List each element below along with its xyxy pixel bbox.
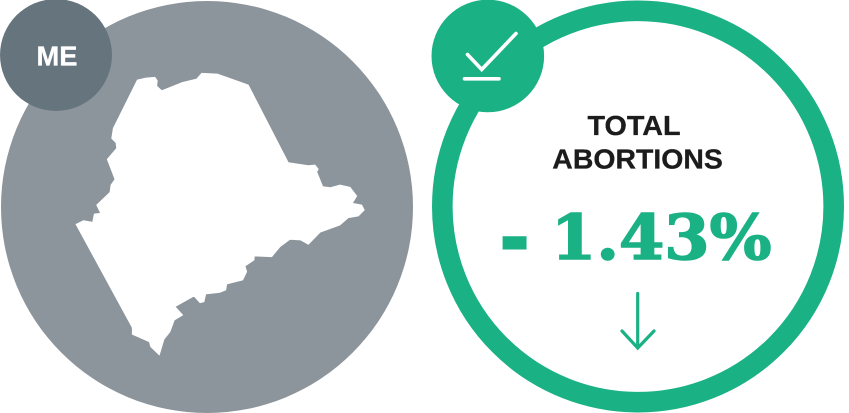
value: -1.43%: -	[498, 176, 531, 294]
heading: total abortions: TOTAL	[588, 110, 680, 141]
panel: total abortions	[432, 0, 834, 402]
state badge: ME	[0, 0, 112, 111]
check badge	[432, 0, 544, 112]
value: -1.43%: 1.43%	[551, 201, 772, 274]
green ring	[442, 11, 834, 402]
value: -1.43%	[498, 176, 772, 294]
grey circle background	[1, 1, 413, 413]
panel: state map	[0, 0, 413, 413]
state badge: ME: ME	[36, 41, 78, 72]
arrow: down	[622, 294, 654, 348]
heading: total abortions: ABORTIONS	[552, 143, 723, 174]
map: Maine silhouette	[76, 73, 364, 355]
